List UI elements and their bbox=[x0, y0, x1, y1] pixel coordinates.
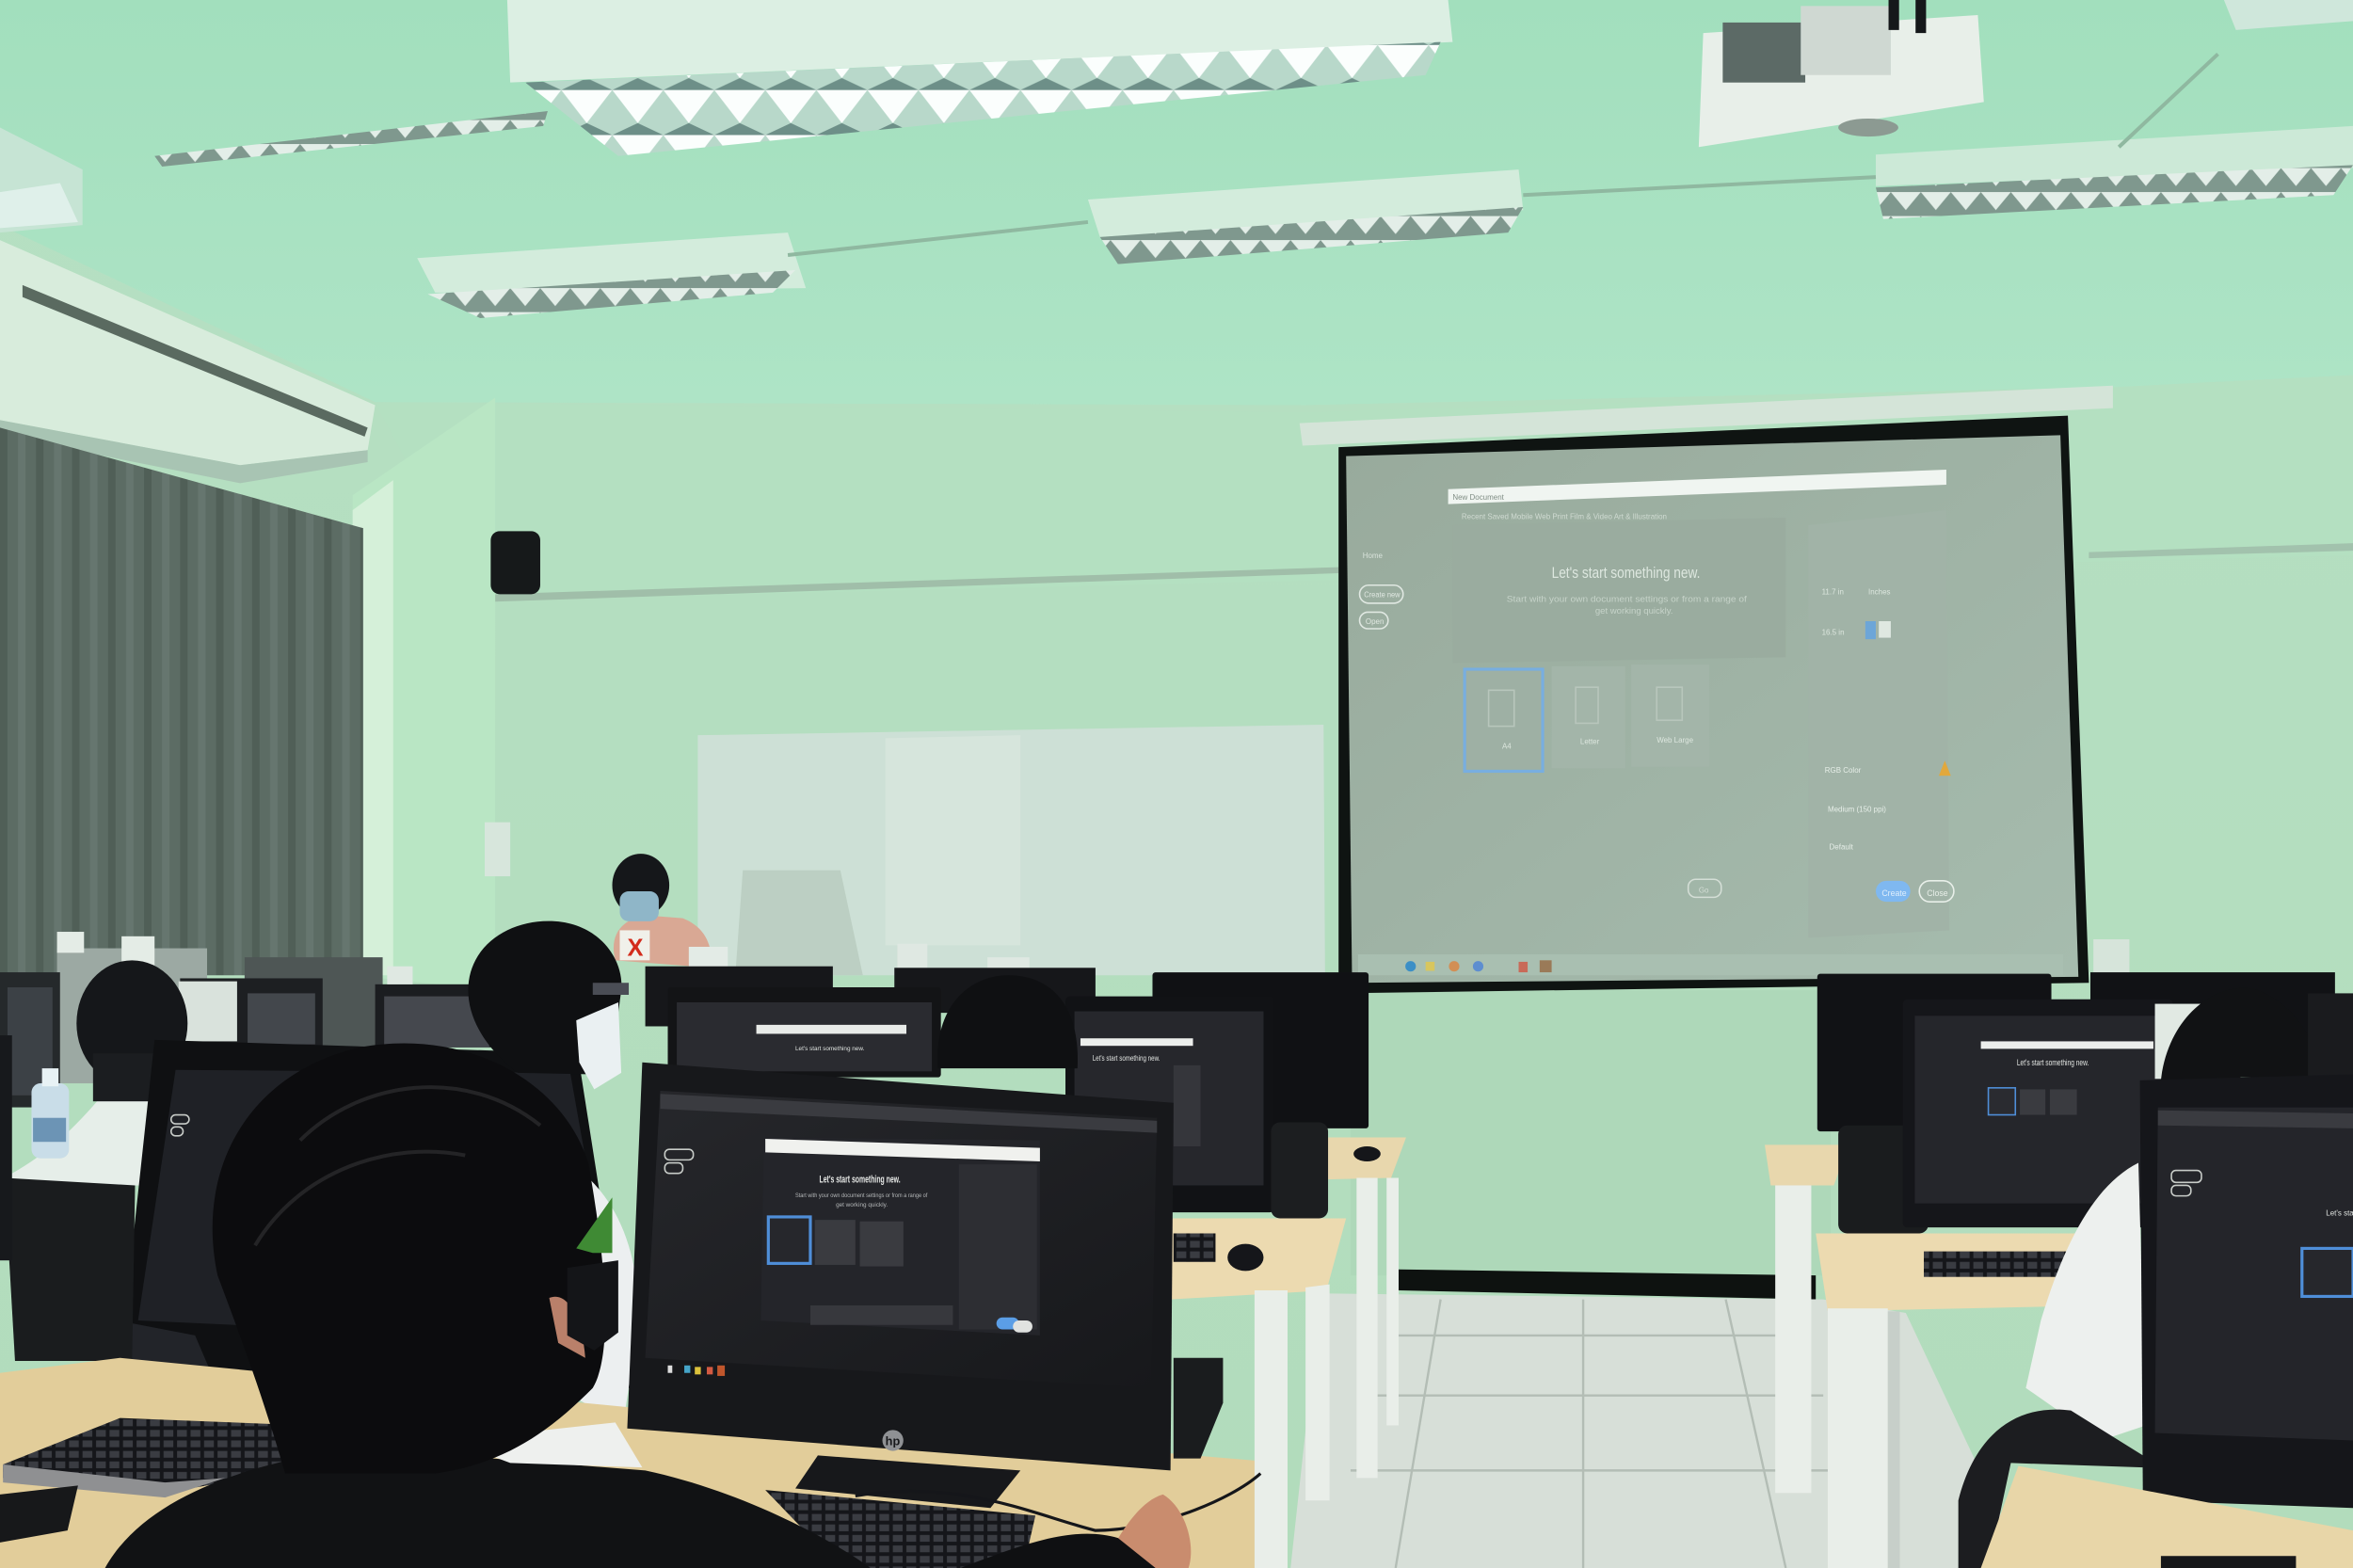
cable bbox=[856, 1474, 1260, 1530]
whiteboard bbox=[697, 725, 1325, 975]
main student: head bbox=[105, 1043, 871, 1568]
keyboard: front centre bbox=[765, 1490, 1035, 1568]
hand bbox=[1103, 1495, 1191, 1568]
window blinds bbox=[0, 427, 363, 975]
monitor: left front bbox=[117, 1040, 631, 1388]
left edge monitor bbox=[0, 1035, 12, 1260]
right edge monitor small bbox=[2308, 993, 2353, 1078]
air conditioner bbox=[0, 240, 376, 483]
screen: taskbar bbox=[1358, 954, 2063, 975]
projection screen: RGB Color bbox=[1825, 766, 1862, 775]
projection screen: Close bbox=[1927, 888, 1948, 898]
taskbar icons bbox=[668, 1366, 725, 1376]
projection screen: Home bbox=[1363, 552, 1384, 560]
hp logo bbox=[883, 1430, 904, 1451]
screen: settings fields: 11.7 in bbox=[1822, 587, 1844, 596]
monitor: centre back: Let's start something new. bbox=[1093, 1054, 1160, 1063]
app screen: heading: Let's start something new. bbox=[820, 1174, 901, 1185]
projection screen: Start with your own document settings or from a range of bbox=[1507, 594, 1747, 604]
projection screen: Create new bbox=[1364, 591, 1401, 600]
chair base bbox=[1174, 1358, 1223, 1459]
ceiling bbox=[0, 0, 2353, 405]
chair: back left bbox=[5, 1177, 135, 1361]
monitor: right back: Let's start something new. bbox=[2017, 1058, 2089, 1067]
student head: back centre bbox=[937, 975, 1078, 1068]
microphone label bbox=[619, 930, 649, 960]
projection screen: Open bbox=[1366, 617, 1384, 626]
middle row back monitors: Let's start something new. bbox=[795, 1046, 865, 1052]
desk legs bbox=[1255, 1285, 1330, 1568]
left long ceiling light bbox=[154, 111, 548, 167]
keyboard: front left bbox=[3, 1418, 308, 1497]
desk: right front bbox=[1981, 1466, 2353, 1568]
projection screen bbox=[1300, 386, 2113, 993]
right desk and monitors bbox=[1765, 972, 2335, 1568]
projection screen: New Document bbox=[1452, 493, 1505, 502]
projection screen: Inches bbox=[1868, 587, 1891, 596]
mid ceiling light centre bbox=[1088, 169, 1523, 264]
floor bbox=[1290, 1293, 2025, 1568]
projection screen: Letter bbox=[1580, 738, 1600, 746]
monitor: right back bbox=[1903, 1000, 2173, 1227]
wall rail bbox=[495, 568, 1338, 601]
paper notice: right bbox=[2155, 1004, 2240, 1079]
monitor: centre back bbox=[1065, 997, 1274, 1212]
screen: title bar bbox=[1449, 470, 1946, 504]
phone bbox=[0, 1485, 78, 1543]
projection screen: Go bbox=[1699, 887, 1709, 895]
projection screen: Recent Saved Mobile Web Print Film & Video Art & Illustration bbox=[1462, 513, 1667, 521]
large ceiling light bbox=[507, 0, 1452, 156]
water bottle bbox=[31, 1068, 69, 1159]
screen: buttons bbox=[1360, 585, 1403, 603]
projector bbox=[1699, 0, 1984, 147]
paper notices bbox=[179, 982, 237, 1041]
mid ceiling light left bbox=[417, 232, 806, 318]
main monitor bbox=[627, 1063, 1174, 1470]
top-right light bbox=[2224, 0, 2353, 30]
upper wall band bbox=[376, 376, 2353, 600]
lower wall under screen bbox=[1351, 990, 1831, 1275]
conduits bbox=[788, 54, 2218, 255]
main monitor: Start with your own document settings or from a range of bbox=[795, 1192, 928, 1199]
app screen: dialog bbox=[760, 1137, 1040, 1336]
wall socket bbox=[485, 823, 510, 876]
student with mask bbox=[468, 921, 639, 1426]
projection screen: Medium (150 ppi) bbox=[1828, 805, 1886, 813]
corner ceiling light bbox=[0, 128, 83, 232]
app screen: preset cards bbox=[768, 1217, 810, 1263]
projection screen: Default bbox=[1830, 842, 1854, 851]
middle row back monitors bbox=[646, 967, 1369, 1128]
back-left chairs and monitors row bbox=[0, 932, 2129, 1108]
projection screen: Let's start something new. bbox=[1552, 564, 1700, 582]
floor skirting bbox=[1399, 1270, 1816, 1300]
projection screen: A4 bbox=[1502, 743, 1512, 751]
projection screen: get working quickly. bbox=[1595, 606, 1673, 616]
screen: right dialog panel bbox=[1808, 510, 1949, 937]
right ceiling light bbox=[1876, 126, 2353, 219]
screen: preset cards bbox=[1465, 669, 1543, 771]
monitor stand bbox=[795, 1455, 1020, 1508]
desk: left front bbox=[0, 1358, 1283, 1568]
teacher bbox=[613, 854, 712, 968]
projection screen: Create bbox=[1881, 888, 1907, 898]
projection screen: 16.5 in bbox=[1822, 628, 1845, 636]
main monitor: get working quickly. bbox=[836, 1202, 888, 1208]
speaker bbox=[490, 531, 540, 594]
left wall column bbox=[353, 397, 495, 990]
back left student bbox=[12, 960, 187, 1185]
teacher: X bbox=[627, 936, 643, 962]
right student bbox=[1959, 988, 2318, 1568]
projection screen: Web Large bbox=[1657, 736, 1694, 744]
monitor: right front bbox=[2140, 1074, 2353, 1508]
main monitor: hp bbox=[886, 1433, 900, 1448]
mouse and keyboard on centre desk bbox=[1174, 1233, 1215, 1262]
